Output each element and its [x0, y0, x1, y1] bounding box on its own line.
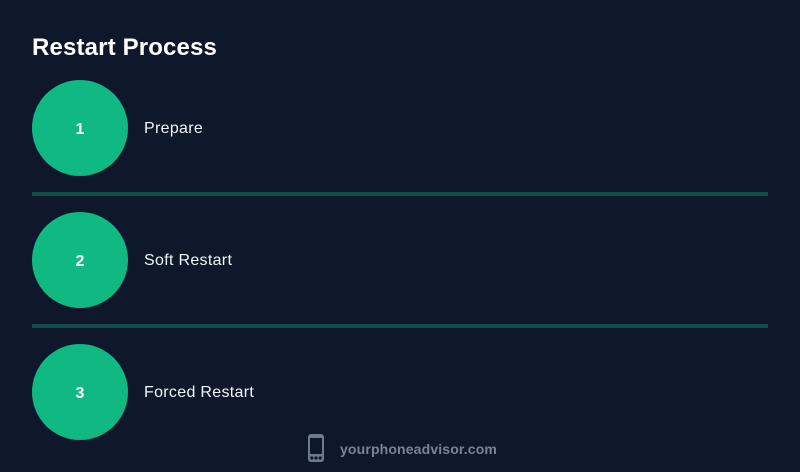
- step 1: [32, 80, 203, 176]
- step 1 label: Prepare: [144, 120, 203, 137]
- footer url: yourphoneadvisor.com: [340, 441, 497, 457]
- step 2 number circle: 2: [76, 253, 84, 270]
- step 3 number circle: 3: [76, 385, 84, 402]
- step 1 number circle: 1: [76, 121, 84, 138]
- icon: smartphone: [308, 434, 324, 462]
- step 2 label: Soft Restart: [144, 252, 232, 269]
- step 1 number circle: [32, 80, 128, 176]
- title: Restart Process: [32, 34, 217, 61]
- footer brand: [308, 434, 497, 462]
- step 2: [32, 212, 232, 308]
- step 3 number circle: [32, 344, 128, 440]
- step 3: [32, 344, 254, 440]
- step 3 label: Forced Restart: [144, 384, 254, 401]
- step 2 number circle: [32, 212, 128, 308]
